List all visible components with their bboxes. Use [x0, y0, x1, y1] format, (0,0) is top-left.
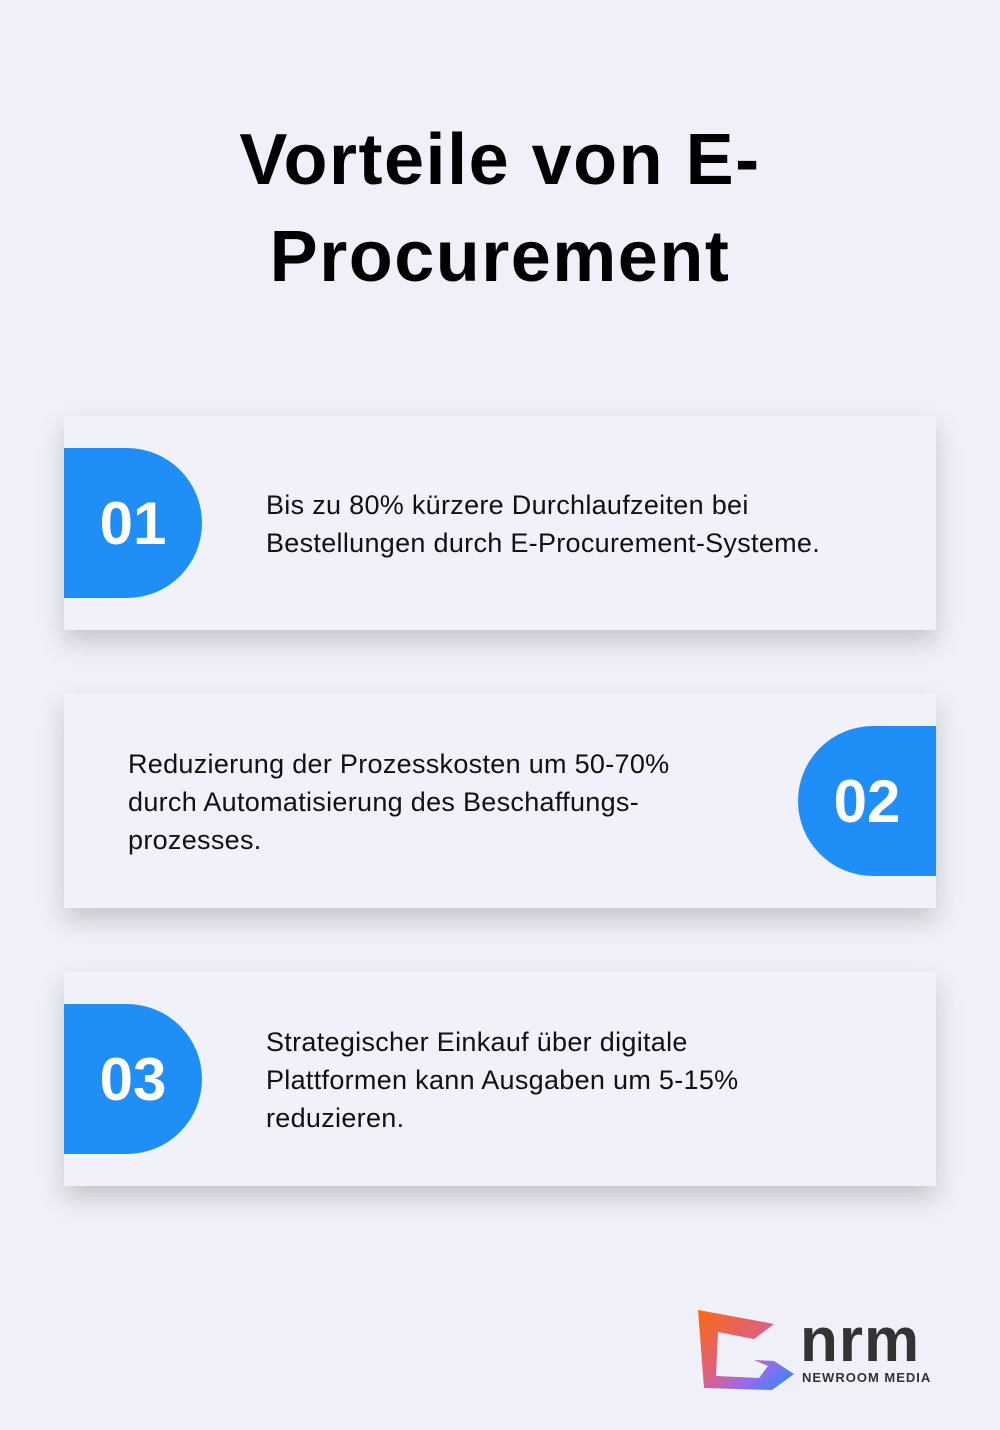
title: Procurement	[270, 217, 730, 297]
logo: NEWROOM MEDIA	[802, 1370, 931, 1385]
logo	[698, 1306, 931, 1390]
title: Vorteile von E-	[239, 120, 761, 200]
logo text: nrm	[800, 1306, 920, 1375]
icon: logo mark	[698, 1310, 794, 1390]
text 02: durch Automatisierung des Beschaffungs-	[128, 787, 639, 817]
title	[239, 120, 761, 297]
badge 03	[64, 1004, 202, 1154]
badge 01	[64, 448, 202, 598]
text 02	[128, 749, 669, 855]
text 01: Bis zu 80% kürzere Durchlaufzeiten bei	[266, 490, 749, 520]
text 01: Bestellungen durch E-Procurement-Systeme.	[266, 528, 820, 558]
text 03	[266, 1027, 738, 1133]
panel: card 01	[64, 416, 936, 630]
badge 02	[798, 726, 936, 876]
text 02: prozesses.	[128, 825, 262, 855]
panel: card 02	[64, 694, 936, 908]
text 03: reduzieren.	[266, 1103, 404, 1133]
badge 02: 02	[834, 768, 900, 834]
text 03: Plattformen kann Ausgaben um 5-15%	[266, 1065, 738, 1095]
text 02: Reduzierung der Prozesskosten um 50-70%	[128, 749, 669, 779]
badge 01: 01	[100, 490, 166, 556]
text 03: Strategischer Einkauf über digitale	[266, 1027, 688, 1057]
text 01	[266, 490, 820, 558]
panel: card 03	[64, 972, 936, 1186]
badge 03: 03	[100, 1046, 166, 1112]
